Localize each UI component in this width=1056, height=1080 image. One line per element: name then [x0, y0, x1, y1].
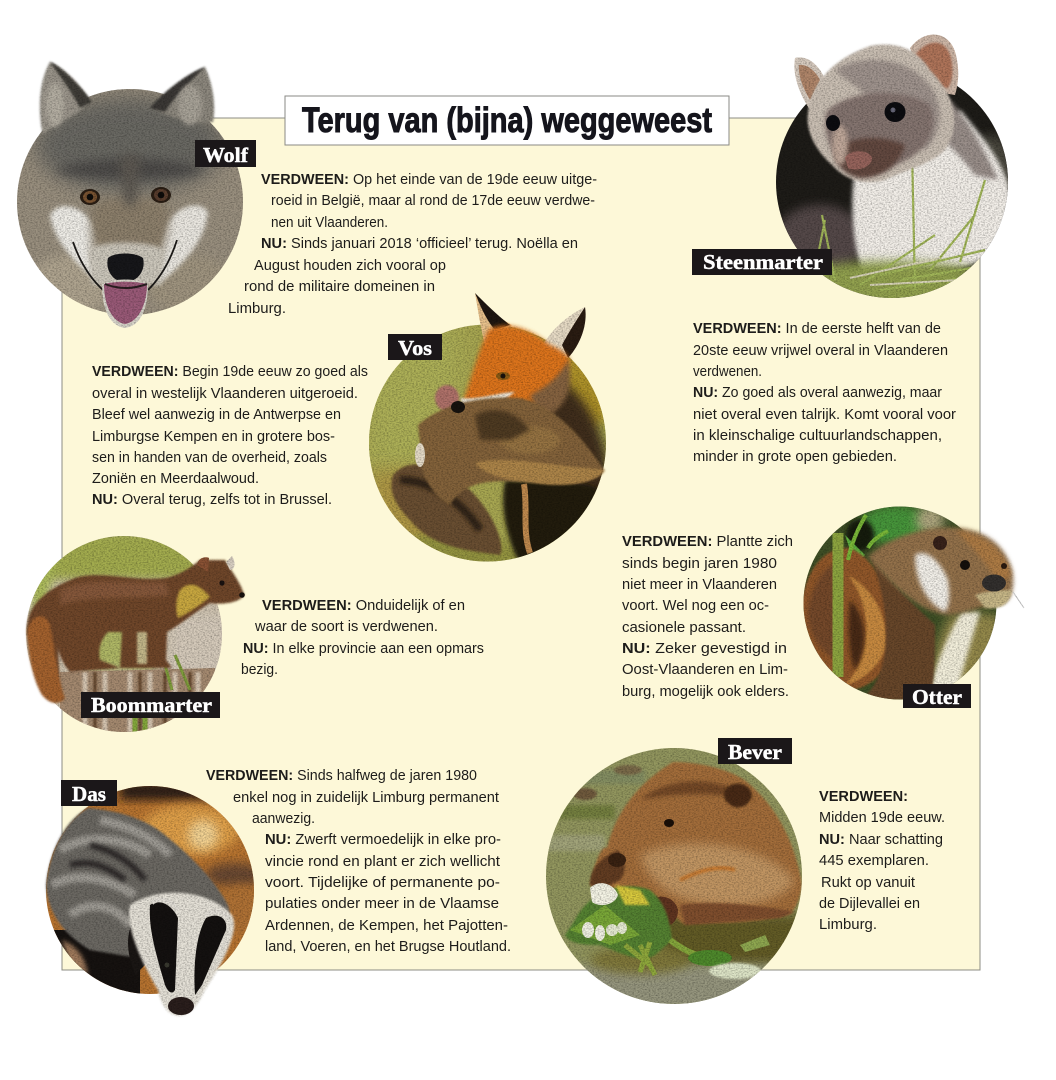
- text block: boommarter: [241, 598, 484, 678]
- background panel: [62, 118, 980, 970]
- text block: boommarter: waar de soort is verdwenen.: [254, 619, 438, 635]
- text block: boommarter: bezig.: [241, 662, 278, 678]
- text block: bever: [819, 789, 945, 933]
- label: Vos: Vos: [398, 336, 432, 360]
- text block: vos: [92, 364, 368, 508]
- photo: vos: [368, 293, 613, 577]
- text block: steenmarter: in kleinschalige cultuurlandschappen,: [693, 428, 942, 444]
- label: Boommarter: Boommarter: [91, 693, 212, 717]
- text block: vos: sen in handen van de overheid, zoals: [92, 450, 327, 466]
- text block: wolf: [228, 172, 597, 317]
- text block: bever: de Dijlevallei en: [819, 896, 920, 912]
- text block: wolf: roeid in België, maar al rond de 17de eeuw verdwe-: [271, 193, 595, 209]
- text block: steenmarter: VERDWEEN: In de eerste helft van de: [693, 321, 941, 337]
- text block: vos: VERDWEEN: Begin 19de eeuw zo goed als: [92, 364, 368, 380]
- text block: otter: niet meer in Vlaanderen: [622, 577, 777, 593]
- title: Terug van (bijna) weggeweest: [302, 101, 712, 140]
- label: Steenmarter: Steenmarter: [703, 250, 823, 274]
- text block: otter: VERDWEEN: Plantte zich: [622, 534, 793, 550]
- label: Das: [61, 780, 117, 806]
- text block: das: aanwezig.: [252, 811, 315, 827]
- text block: vos: Limburgse Kempen en in grotere bos-: [92, 429, 335, 445]
- text block: bever: NU: Naar schatting: [819, 832, 943, 848]
- text block: steenmarter: 20ste eeuw vrijwel overal in Vlaanderen: [693, 343, 948, 359]
- text block: otter: burg, mogelijk ook elders.: [622, 684, 789, 700]
- text block: vos: Bleef wel aanwezig in de Antwerpse en: [92, 407, 341, 423]
- title: [285, 96, 729, 145]
- text block: das: [206, 768, 511, 955]
- text block: otter: sinds begin jaren 1980: [622, 556, 777, 572]
- text block: bever: Limburg.: [819, 917, 877, 933]
- text block: das: Ardennen, de Kempen, het Pajotten-: [265, 918, 508, 934]
- label: Bever: Bever: [728, 740, 782, 764]
- text block: vos: Zoniën en Meerdaalwoud.: [92, 471, 259, 487]
- photo: otter: [800, 505, 1024, 700]
- text block: steenmarter: niet overal even talrijk. Komt vooral voor: [693, 407, 956, 423]
- text block: steenmarter: minder in grote open gebieden.: [693, 449, 897, 465]
- text block: bever: Midden 19de eeuw.: [819, 810, 945, 826]
- text block: otter: Oost-Vlaanderen en Lim-: [622, 662, 788, 678]
- photo: boommarter: [20, 530, 245, 735]
- text block: wolf: August houden zich vooral op: [254, 258, 446, 274]
- text block: das: enkel nog in zuidelijk Limburg permanent: [233, 790, 499, 806]
- text block: boommarter: NU: In elke provincie aan een opmars: [243, 641, 484, 657]
- panel: wolf: [17, 62, 597, 328]
- text block: das: voort. Tijdelijke of permanente po-: [265, 875, 500, 891]
- text block: das: pulaties onder meer in de Vlaamse: [265, 896, 499, 912]
- label: Otter: Otter: [912, 685, 962, 709]
- text block: bever: VERDWEEN:: [819, 789, 908, 805]
- text block: bever: 445 exemplaren.: [819, 853, 929, 869]
- text block: das: NU: Zwerft vermoedelijk in elke pro-: [265, 832, 501, 848]
- label: Das: Das: [72, 782, 106, 806]
- label: Wolf: Wolf: [203, 143, 249, 167]
- photo: das: [46, 782, 265, 1016]
- panel: otter: [622, 505, 1024, 709]
- label: Wolf: [195, 140, 256, 167]
- text block: otter: [622, 534, 793, 700]
- text block: steenmarter: verdwenen.: [693, 364, 762, 380]
- text block: otter: NU: Zeker gevestigd in: [622, 641, 787, 657]
- photo: steenmarter: [775, 34, 1015, 309]
- panel: steenmarter: [692, 34, 1015, 465]
- text block: das: vincie rond en plant er zich wellicht: [265, 854, 500, 870]
- panel: boommarter: [20, 530, 484, 735]
- text block: steenmarter: [693, 321, 956, 465]
- text block: boommarter: VERDWEEN: Onduidelijk of en: [262, 598, 465, 614]
- text block: wolf: NU: Sinds januari 2018 ‘officieel’ terug. Noëlla en: [261, 236, 578, 252]
- label: Otter: [903, 684, 971, 709]
- panel: bever: [545, 738, 945, 1010]
- text block: wolf: rond de militaire domeinen in: [244, 279, 435, 295]
- text block: wolf: VERDWEEN: Op het einde van de 19de eeuw uitge-: [261, 172, 597, 188]
- text block: wolf: nen uit Vlaanderen.: [271, 215, 388, 231]
- panel: das: [46, 768, 511, 1016]
- photo: wolf: [17, 62, 243, 328]
- text block: steenmarter: NU: Zo goed als overal aanwezig, maar: [693, 385, 942, 401]
- photo: bever: [545, 748, 805, 1010]
- text block: bever: Rukt op vanuit: [821, 875, 915, 891]
- text block: otter: voort. Wel nog een oc-: [622, 598, 769, 614]
- text block: vos: NU: Overal terug, zelfs tot in Brussel.: [92, 492, 332, 508]
- label: Vos: [388, 334, 442, 360]
- label: Bever: [718, 738, 792, 764]
- panel: vos: [92, 293, 613, 577]
- text block: otter: casionele passant.: [622, 620, 746, 636]
- text block: vos: overal in westelijk Vlaanderen uitgeroeid.: [92, 386, 358, 402]
- text block: wolf: Limburg.: [228, 301, 286, 317]
- text block: das: land, Voeren, en het Brugse Houtland.: [265, 939, 511, 955]
- text block: das: VERDWEEN: Sinds halfweg de jaren 1980: [206, 768, 477, 784]
